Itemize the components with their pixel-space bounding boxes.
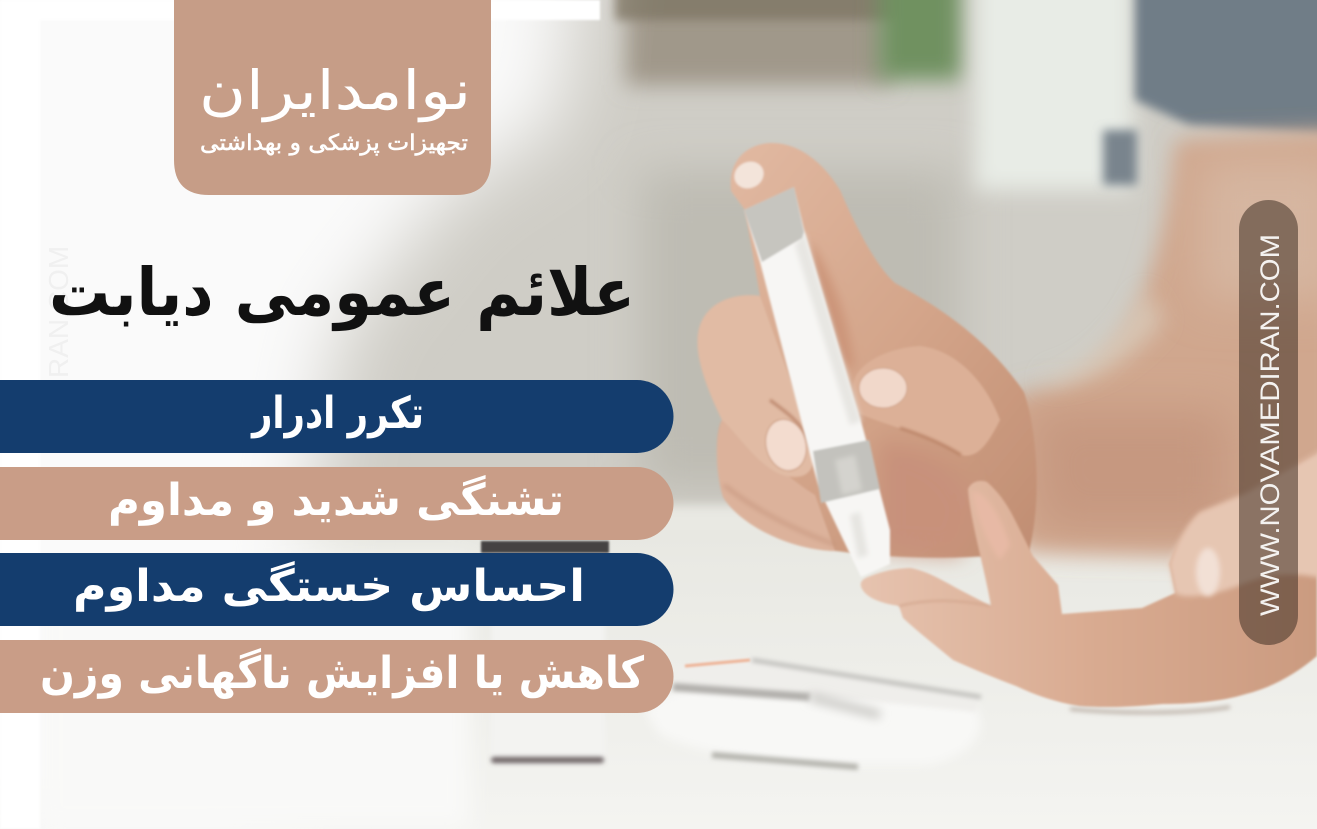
middle finger: [697, 295, 814, 477]
fingernail: index finger: [730, 157, 768, 193]
title: علائم عمومی دیابت: [49, 254, 635, 332]
palm contact shadow: [1070, 707, 1230, 713]
symptom bar 2: تشنگی شدید و مداوم: [108, 474, 564, 526]
fingernail: middle finger: [760, 415, 812, 475]
lower hand with extended finger: [861, 445, 1317, 707]
glucose meter: [645, 658, 981, 767]
finger crease: [899, 601, 991, 606]
hand holding the pen: [697, 143, 1037, 558]
lancet pen: [744, 187, 890, 577]
logo panel: [174, 0, 491, 195]
fingernail: thumb: [859, 368, 907, 408]
logo name: نوامدایران: [199, 59, 471, 122]
table surface: [0, 505, 1317, 829]
thumb of lower hand: [1169, 445, 1317, 596]
symptom bar 1: تکرر ادرار: [250, 388, 424, 439]
symptom bar 3: احساس خستگی مداوم: [73, 560, 585, 612]
medicine bottle: [481, 541, 609, 763]
faint watermark: RAN.COM: [43, 246, 74, 378]
symptom bar 4: [0, 640, 674, 713]
logo tagline: تجهیزات پزشکی و بهداشتی: [200, 131, 468, 156]
forearm behind the hand: [1000, 130, 1317, 556]
thumb: [853, 346, 1000, 456]
extended finger highlight: [972, 492, 1010, 560]
palm shadow: [880, 440, 975, 555]
white fade over left side: [0, 0, 585, 829]
ring and little fingers: [717, 420, 835, 551]
website pill: WWW.NOVAMEDIRAN.COM: [1255, 234, 1285, 616]
blurred room: [0, 0, 1317, 540]
website pill: [1239, 200, 1298, 645]
symptom bar 2: [0, 467, 674, 540]
symptom bar 4: کاهش یا افزایش ناگهانی وزن: [40, 647, 644, 699]
symptom bar 1: [0, 380, 674, 453]
symptom bar 3: [0, 553, 674, 626]
white page margin: [0, 0, 600, 829]
